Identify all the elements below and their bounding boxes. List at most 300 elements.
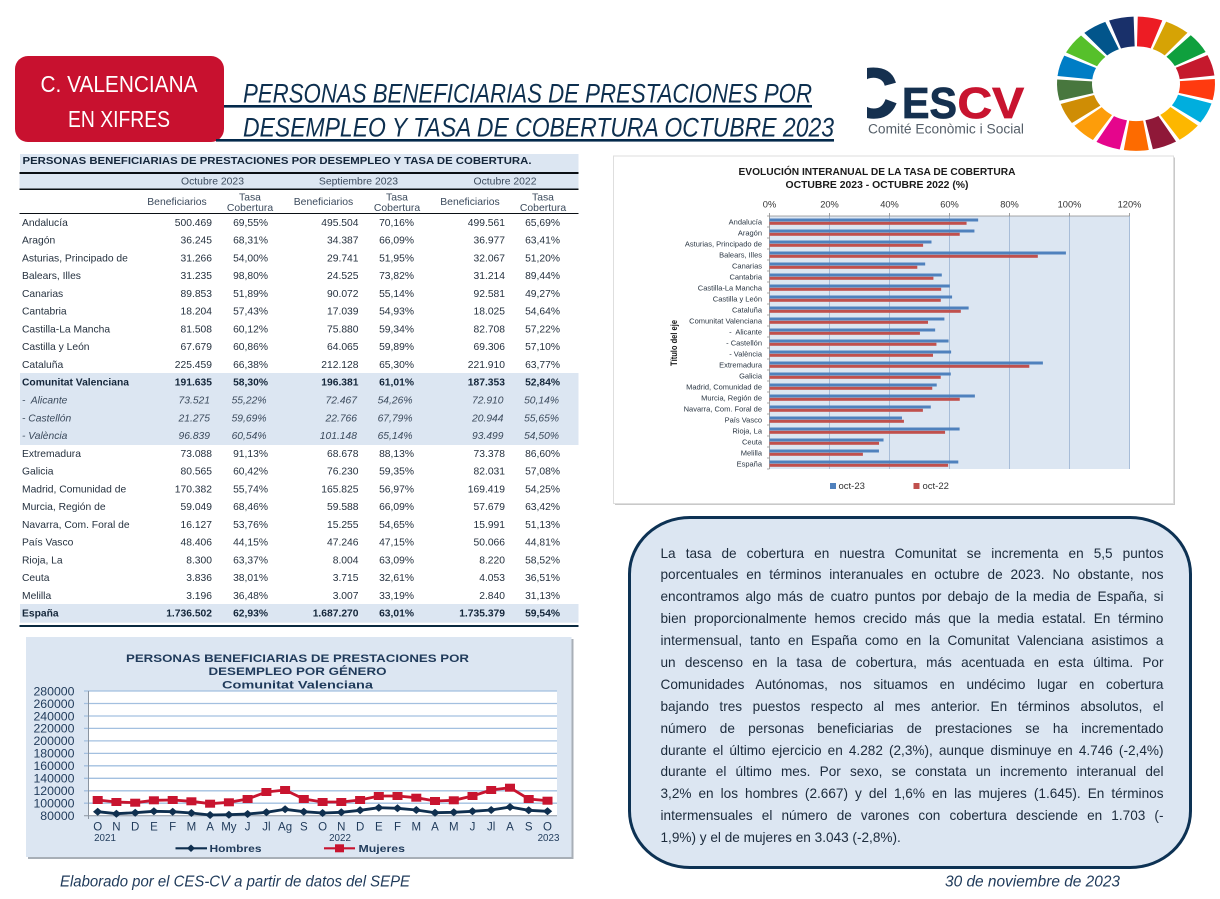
- x axis month labels: N: [112, 822, 121, 834]
- row: Canarias: 55,14%: [379, 289, 414, 300]
- row: España: 62,93%: [233, 609, 268, 620]
- x axis month labels: O: [93, 822, 102, 834]
- row: Asturias: 29.741: [327, 253, 359, 264]
- row: Murcia: 59.049: [180, 502, 212, 513]
- table header: [20, 172, 578, 214]
- commentary text: durante el último ejercicio en 4.282 (2,3%), aunque disminuye en 4.746 (-2,4%): [660, 743, 1164, 758]
- row: Alicante: 54,26%: [378, 396, 412, 406]
- row: Murcia: 66,09%: [379, 502, 414, 513]
- row: Andalucía: 70,16%: [379, 218, 414, 229]
- category labels: Aragón: [738, 228, 762, 237]
- x axis month labels: A: [431, 822, 439, 834]
- axis percent labels: [763, 200, 1141, 210]
- row: Aragón: 34.387: [327, 236, 359, 247]
- row: Comunitat Valenciana: Comunitat Valenciana: [22, 378, 129, 389]
- row: Rioja: Rioja, La: [22, 555, 63, 566]
- row: Castellón: 22.766: [324, 413, 357, 424]
- row: Melilla: 31,13%: [525, 591, 560, 602]
- bottom rule: [20, 625, 578, 627]
- x axis month labels: S: [300, 822, 308, 834]
- table header: Beneficiarios: [294, 197, 353, 208]
- row: Aragón: 36.245: [180, 236, 212, 247]
- row: España: 1.687.270: [313, 609, 359, 620]
- row: Cataluña: 65,30%: [379, 360, 414, 371]
- row: Castilla-La Mancha: Castilla-La Mancha: [22, 324, 110, 335]
- category labels: Extremadura: [719, 360, 763, 369]
- category labels: - Alicante: [729, 327, 762, 336]
- row: Madrid: 170.382: [175, 484, 212, 495]
- row: España: España: [22, 609, 59, 620]
- bars oct-22: [770, 222, 1038, 467]
- row: Murcia: [22, 502, 560, 513]
- row: Galicia: 80.565: [180, 467, 212, 478]
- row: Castilla-La Mancha: 81.508: [180, 324, 212, 335]
- y axis labels: 260000: [33, 697, 75, 711]
- x axis month labels: N: [337, 822, 345, 834]
- row: País Vasco: 44,15%: [233, 538, 268, 549]
- footer: date: 30 de noviembre de 2023: [945, 874, 1120, 890]
- row: Comunitat Valenciana: 196.381: [321, 378, 359, 389]
- line chart title: [126, 653, 469, 692]
- row: Madrid: 54,25%: [525, 484, 560, 495]
- row: Asturias: 51,20%: [525, 253, 560, 264]
- panel: data table: [20, 154, 578, 627]
- row: València: 65,14%: [378, 431, 412, 442]
- row: Rioja: 8.220: [479, 555, 505, 566]
- line chart title: Comunitat Valenciana: [222, 680, 374, 692]
- table header: Cobertura: [227, 203, 273, 214]
- bar chart title: [738, 165, 1016, 191]
- axis percent labels: 40%: [880, 200, 899, 210]
- x axis month labels: A: [506, 822, 514, 834]
- row: Castilla-La Mancha: [22, 324, 560, 335]
- y axis labels: [33, 684, 75, 823]
- row: Cataluña: Cataluña: [22, 360, 63, 371]
- y axis labels: 280000: [33, 684, 75, 698]
- row: Extremadura: 86,60%: [525, 449, 560, 460]
- row: Aragón: 63,41%: [525, 236, 560, 247]
- y axis labels: 120000: [33, 784, 75, 798]
- panel: commentary background: [628, 516, 1192, 869]
- row: Galicia: 57,08%: [525, 467, 560, 478]
- y axis labels: 220000: [33, 722, 75, 736]
- row: Galicia: 59,35%: [379, 467, 414, 478]
- table header: Cobertura: [374, 203, 420, 214]
- x axis month labels: J: [245, 822, 250, 834]
- x axis month labels: M: [449, 822, 459, 834]
- category labels: Cantabria: [729, 272, 763, 281]
- row: Andalucía: 499.561: [468, 218, 505, 229]
- row: Galicia: Galicia: [22, 467, 54, 478]
- category labels: España: [737, 459, 763, 468]
- row: Andalucía: 69,55%: [233, 218, 268, 229]
- table title band: [20, 154, 578, 172]
- row: Castilla y León: [22, 342, 560, 353]
- row: Navarra: 15.991: [474, 520, 505, 531]
- highlight band: España: [20, 604, 578, 623]
- x axis month labels: [93, 822, 552, 834]
- row: Cantabria: 54,93%: [379, 307, 414, 318]
- row: Murcia: 63,42%: [525, 502, 560, 513]
- bars oct-23: [770, 218, 1066, 464]
- axis percent labels: 60%: [940, 200, 959, 210]
- category labels: Balears, Illes: [719, 250, 762, 259]
- row: Ceuta: 3.836: [186, 573, 212, 584]
- row: València: - València: [22, 431, 68, 442]
- row: Murcia: 68,46%: [233, 502, 268, 513]
- x axis year labels: 2023: [538, 833, 560, 844]
- table header: Tasa: [386, 192, 408, 204]
- category labels: Cataluña: [732, 305, 763, 314]
- row: Navarra: 15.255: [327, 520, 359, 531]
- row: Castellón: 55,65%: [524, 413, 559, 424]
- commentary text: porcentuales en términos interanuales en octubre de 2023. No obstante, nos: [660, 567, 1164, 582]
- x axis month labels: Jl: [487, 822, 495, 834]
- row: Balears: [22, 271, 560, 282]
- commentary text: [660, 546, 1164, 845]
- footer: source: Elaborado por el CES-CV a partir de datos del SEPE: [60, 874, 411, 890]
- row: València: 54,50%: [524, 431, 559, 442]
- row: Andalucía: 495.504: [321, 218, 359, 229]
- table header: Septiembre 2023: [319, 176, 398, 188]
- row: Melilla: 36,48%: [233, 591, 268, 602]
- row: Extremadura: 88,13%: [379, 449, 414, 460]
- row: Castilla-La Mancha: 59,34%: [379, 324, 414, 335]
- row: Balears: 89,44%: [525, 271, 560, 282]
- row: Andalucía: Andalucía: [22, 218, 68, 229]
- panel: bar chart coverage rate: [614, 156, 1175, 505]
- row: España: [22, 609, 560, 620]
- row: España: 59,54%: [525, 609, 560, 620]
- row: Aragón: 68,31%: [233, 236, 268, 247]
- axis title: Título del eje: [669, 320, 680, 366]
- row: Madrid: Madrid, Comunidad de: [22, 484, 126, 495]
- row: Comunitat Valenciana: 52,84%: [525, 378, 560, 389]
- row: Cataluña: [22, 360, 560, 371]
- table header: Octubre 2022: [474, 176, 537, 188]
- commentary text: bajando tres puestos respecto al mes anterior. En términos absolutos, el: [660, 699, 1164, 714]
- panel: line chart by gender: [26, 637, 574, 859]
- table header: Octubre 2023: [181, 176, 244, 188]
- row: País Vasco: 47.246: [327, 538, 359, 549]
- axis percent labels: 120%: [1118, 200, 1141, 210]
- row: Murcia: 57.679: [474, 502, 505, 513]
- row: Andalucía: 65,69%: [525, 218, 560, 229]
- x axis month labels: F: [394, 822, 401, 834]
- line chart legend: Hombres: [210, 843, 262, 855]
- row: Castilla y León: 64.065: [327, 342, 359, 353]
- badge: C. Valenciana en xifres: EN XIFRES: [68, 106, 170, 132]
- row: Asturias: 32.067: [474, 253, 505, 264]
- row: Extremadura: 73.378: [474, 449, 505, 460]
- table header: Tasa: [532, 192, 554, 204]
- row: Ceuta: 38,01%: [233, 573, 268, 584]
- x axis month labels: E: [375, 822, 383, 834]
- row: Cantabria: [22, 307, 560, 318]
- y axis labels: 200000: [33, 734, 75, 748]
- category labels: Melilla: [741, 448, 763, 457]
- row: Murcia: 59.588: [327, 502, 359, 513]
- x axis month labels: D: [356, 822, 364, 834]
- commentary text: Comunidades Autónomas, nos situamos en undécimo lugar en cobertura: [660, 677, 1164, 692]
- category labels: Galicia: [739, 371, 763, 380]
- row: Galicia: [22, 467, 560, 478]
- row: Alicante: [22, 396, 559, 406]
- row: Canarias: 49,27%: [525, 289, 560, 300]
- row: Rioja: 63,37%: [233, 555, 268, 566]
- table header: Cobertura: [520, 203, 566, 214]
- row: Alicante: 73.521: [178, 396, 210, 406]
- bar chart title: EVOLUCIÓN INTERANUAL DE LA TASA DE COBERTURA: [738, 165, 1016, 178]
- bar chart title: OCTUBRE 2023 - OCTUBRE 2022 (%): [786, 180, 968, 191]
- row: Balears: 24.525: [327, 271, 359, 282]
- row: Extremadura: 73.088: [180, 449, 212, 460]
- row: Castilla y León: Castilla y León: [22, 342, 90, 353]
- row: Canarias: 89.853: [180, 289, 212, 300]
- badge: C. Valenciana en xifres: C. VALENCIANA: [40, 71, 198, 97]
- row: Aragón: [22, 236, 560, 247]
- row: Madrid: 169.419: [468, 484, 505, 495]
- category labels: Canarias: [732, 261, 762, 270]
- category labels: [684, 217, 763, 468]
- x axis month labels: F: [169, 822, 176, 834]
- row: Murcia: Murcia, Región de: [22, 502, 106, 513]
- row: Castilla-La Mancha: 75.880: [327, 324, 359, 335]
- row: Alicante: 50,14%: [524, 396, 559, 406]
- row: Canarias: 90.072: [327, 289, 359, 300]
- commentary text: encontramos algo más de cuatro puntos por debajo de la media de España, si: [660, 589, 1164, 604]
- row: Asturias: 51,95%: [379, 253, 414, 264]
- commentary text: número de personas beneficiarias de prestaciones se ha incrementado: [660, 721, 1164, 736]
- category labels: Andalucía: [729, 217, 763, 226]
- x axis month labels: E: [150, 822, 158, 834]
- row: Comunitat Valenciana: 187.353: [468, 378, 505, 389]
- row: Rioja: [22, 555, 560, 566]
- x axis month labels: M: [412, 822, 421, 834]
- row: Andalucía: [22, 218, 560, 229]
- row: Asturias: Asturias, Principado de: [22, 253, 128, 264]
- row: Ceuta: Ceuta: [22, 573, 50, 584]
- table title band: PERSONAS BENEFICIARIAS DE PRESTACIONES POR DESEMPLEO Y TASA DE COBERTURA.: [22, 156, 532, 167]
- row: Alicante: - Alicante: [22, 396, 68, 406]
- row: Aragón: 66,09%: [379, 236, 414, 247]
- table header: Beneficiarios: [440, 197, 500, 208]
- logo: CES CV: [867, 68, 1024, 134]
- category labels: Madrid, Comunidad de: [686, 382, 762, 391]
- line chart title: DESEMPLEO POR GÉNERO: [208, 665, 387, 678]
- row: Cantabria: 18.204: [180, 307, 212, 318]
- commentary text: intermensual, tanto en España como en la Comunitat Valenciana asistimos a: [660, 633, 1164, 648]
- plot area: [88, 691, 557, 816]
- row: Asturias: 54,00%: [233, 253, 268, 264]
- row: Comunitat Valenciana: 191.635: [175, 378, 212, 389]
- category labels: Asturias, Principado de: [685, 239, 762, 248]
- row: València: 101.148: [320, 431, 357, 442]
- logo: CES CV: CV: [958, 80, 1024, 128]
- row: Rioja: 8.004: [333, 555, 359, 566]
- row: Castellón: [22, 413, 559, 424]
- category labels: Navarra, Com. Foral de: [684, 404, 762, 413]
- row: Canarias: 51,89%: [233, 289, 268, 300]
- row: Castilla y León: 57,10%: [525, 342, 560, 353]
- category labels: Ceuta: [742, 437, 763, 446]
- row: Alicante: 72.467: [326, 396, 358, 406]
- row: Navarra: 16.127: [180, 520, 212, 531]
- row: Cantabria: 17.039: [327, 307, 359, 318]
- row: Canarias: [22, 289, 560, 300]
- row: España: 1.735.379: [459, 609, 505, 620]
- row: Aragón: Aragón: [22, 236, 55, 247]
- row: Extremadura: 91,13%: [233, 449, 268, 460]
- row: Melilla: [22, 591, 560, 602]
- commentary text: intermensuales el número de varones con cobertura desciende en 1.703 (-: [660, 808, 1164, 823]
- x axis month labels: S: [525, 822, 533, 834]
- row: València: 60,54%: [232, 431, 266, 442]
- category labels: País Vasco: [725, 415, 762, 424]
- row: Castellón: 21.275: [178, 413, 210, 424]
- commentary text: durante el último mes. Por sexo, se constata un incremento interanual del: [660, 764, 1164, 779]
- commentary text: La tasa de cobertura en nuestra Comunitat se incrementa en 5,5 puntos: [660, 546, 1164, 560]
- row: Ceuta: 3.715: [333, 573, 359, 584]
- logo: CES CV: C: [847, 55, 897, 132]
- x axis month labels: O: [318, 822, 327, 834]
- commentary text: un descenso en la tasa de cobertura, más acentuada en esta última. Por: [660, 655, 1164, 670]
- row: Rioja: 58,52%: [525, 555, 560, 566]
- row: Melilla: Melilla: [22, 591, 51, 602]
- row: País Vasco: País Vasco: [22, 538, 74, 549]
- row: Cataluña: 212.128: [321, 360, 359, 371]
- x axis year labels: 2021: [94, 833, 116, 844]
- line: Hombres: [98, 807, 547, 815]
- category labels: Murcia, Región de: [701, 393, 762, 402]
- row: Melilla: 33,19%: [379, 591, 414, 602]
- main title: DESEMPLEO Y TASA DE COBERTURA OCTUBRE 2023: [243, 112, 834, 142]
- row: País Vasco: 50.066: [474, 538, 505, 549]
- line chart legend: Mujeres: [358, 843, 405, 855]
- row: Comunitat Valenciana: 61,01%: [379, 378, 414, 389]
- row: Canarias: Canarias: [22, 289, 63, 300]
- badge: C. Valenciana en xifres: [15, 56, 224, 142]
- row: València: [22, 431, 559, 442]
- row: València: 93.499: [472, 431, 504, 442]
- row: Madrid: 55,74%: [233, 484, 268, 495]
- bar chart legend: oct-23: [838, 481, 865, 492]
- x axis year labels: 2022: [329, 833, 351, 844]
- row: Cataluña: 225.459: [175, 360, 212, 371]
- x axis month labels: Ag: [278, 822, 292, 834]
- row: Balears: 31.214: [474, 271, 505, 282]
- row: Ceuta: 4.053: [479, 573, 505, 584]
- main title: PERSONAS BENEFICIARIAS DE PRESTACIONES POR: [243, 78, 812, 108]
- row: València: 96.839: [178, 431, 210, 442]
- row: Melilla: 3.196: [186, 591, 212, 602]
- category labels: Rioja, La: [732, 426, 763, 435]
- main title: [216, 78, 834, 142]
- row: Ceuta: 32,61%: [379, 573, 414, 584]
- row: Alicante: 72.910: [472, 396, 504, 406]
- category labels: - València: [729, 349, 763, 358]
- x axis month labels: J: [470, 822, 475, 834]
- row: País Vasco: 44,81%: [525, 538, 560, 549]
- row: Galicia: 76.230: [327, 467, 359, 478]
- row: Cantabria: Cantabria: [22, 307, 67, 318]
- row: Andalucía: 500.469: [175, 218, 212, 229]
- line chart legend: [176, 843, 405, 855]
- x axis year labels: [94, 833, 560, 844]
- x axis month labels: M: [187, 822, 196, 834]
- icon: SDG colour wheel: [1049, 10, 1220, 158]
- row: Balears: 31.235: [180, 271, 212, 282]
- row: Castilla y León: 67.679: [180, 342, 212, 353]
- row: Balears: 73,82%: [379, 271, 414, 282]
- commentary text: bien proporcionalmente hemos crecido más que la media estatal. En término: [660, 611, 1164, 626]
- axis percent labels: 0%: [763, 200, 776, 210]
- y axis labels: 140000: [33, 772, 75, 786]
- row: Castellón: - Castellón: [22, 413, 71, 424]
- row: Castilla-La Mancha: 60,12%: [233, 324, 268, 335]
- row: Cataluña: 66,38%: [233, 360, 268, 371]
- row: Cataluña: 63,77%: [525, 360, 560, 371]
- row: Extremadura: 68.678: [327, 449, 359, 460]
- commentary text: 1,9%) y el de mujeres en 3.043 (-2,8%).: [660, 830, 901, 845]
- row: País Vasco: [22, 538, 560, 549]
- row: Asturias: 31.266: [180, 253, 212, 264]
- row: Castilla y León: 60,86%: [233, 342, 268, 353]
- x axis month labels: My: [221, 822, 237, 834]
- bar chart legend: [830, 481, 949, 492]
- row: Madrid: 165.825: [321, 484, 359, 495]
- category labels: Castilla-La Mancha: [698, 283, 763, 292]
- row: Extremadura: [22, 449, 560, 460]
- row: Castilla y León: 59,89%: [379, 342, 414, 353]
- y axis labels: 80000: [40, 809, 75, 823]
- row: País Vasco: 47,15%: [379, 538, 414, 549]
- row: Rioja: 8.300: [186, 555, 212, 566]
- row: Madrid: [22, 484, 560, 495]
- axis percent labels: 80%: [1000, 200, 1019, 210]
- y axis labels: 240000: [33, 709, 75, 723]
- category labels: Comunitat Valenciana: [689, 316, 763, 325]
- row: Navarra: 51,13%: [525, 520, 560, 531]
- row: Madrid: 56,97%: [379, 484, 414, 495]
- category labels: - Castellón: [726, 338, 762, 347]
- logo: CES CV: ES: [902, 80, 957, 128]
- row: Aragón: 36.977: [474, 236, 505, 247]
- row: Castellón: 20.944: [471, 413, 504, 424]
- row: Cantabria: 18.025: [474, 307, 505, 318]
- row: España: 1.736.502: [166, 609, 212, 620]
- row: Navarra: 53,76%: [233, 520, 268, 531]
- table header: Beneficiarios: [147, 197, 207, 208]
- y axis labels: 160000: [33, 759, 75, 773]
- row: Cataluña: 221.910: [468, 360, 505, 371]
- y axis labels: 180000: [33, 747, 75, 761]
- row: Balears: Balears, Illes: [22, 271, 81, 282]
- row: España: 63,01%: [379, 609, 414, 620]
- row: País Vasco: 48.406: [180, 538, 212, 549]
- axis percent labels: 100%: [1058, 200, 1081, 210]
- row: Cantabria: 54,64%: [525, 307, 560, 318]
- axis percent labels: 20%: [820, 200, 839, 210]
- row: Comunitat Valenciana: 58,30%: [233, 378, 268, 389]
- plot background: [770, 216, 1130, 469]
- row: Castellón: 59,69%: [232, 413, 266, 424]
- category labels: Castilla y León: [713, 294, 762, 303]
- row: Cantabria: 57,43%: [233, 307, 268, 318]
- x axis month labels: A: [206, 822, 214, 834]
- row: Melilla: 3.007: [333, 591, 359, 602]
- row: Navarra: [22, 520, 560, 531]
